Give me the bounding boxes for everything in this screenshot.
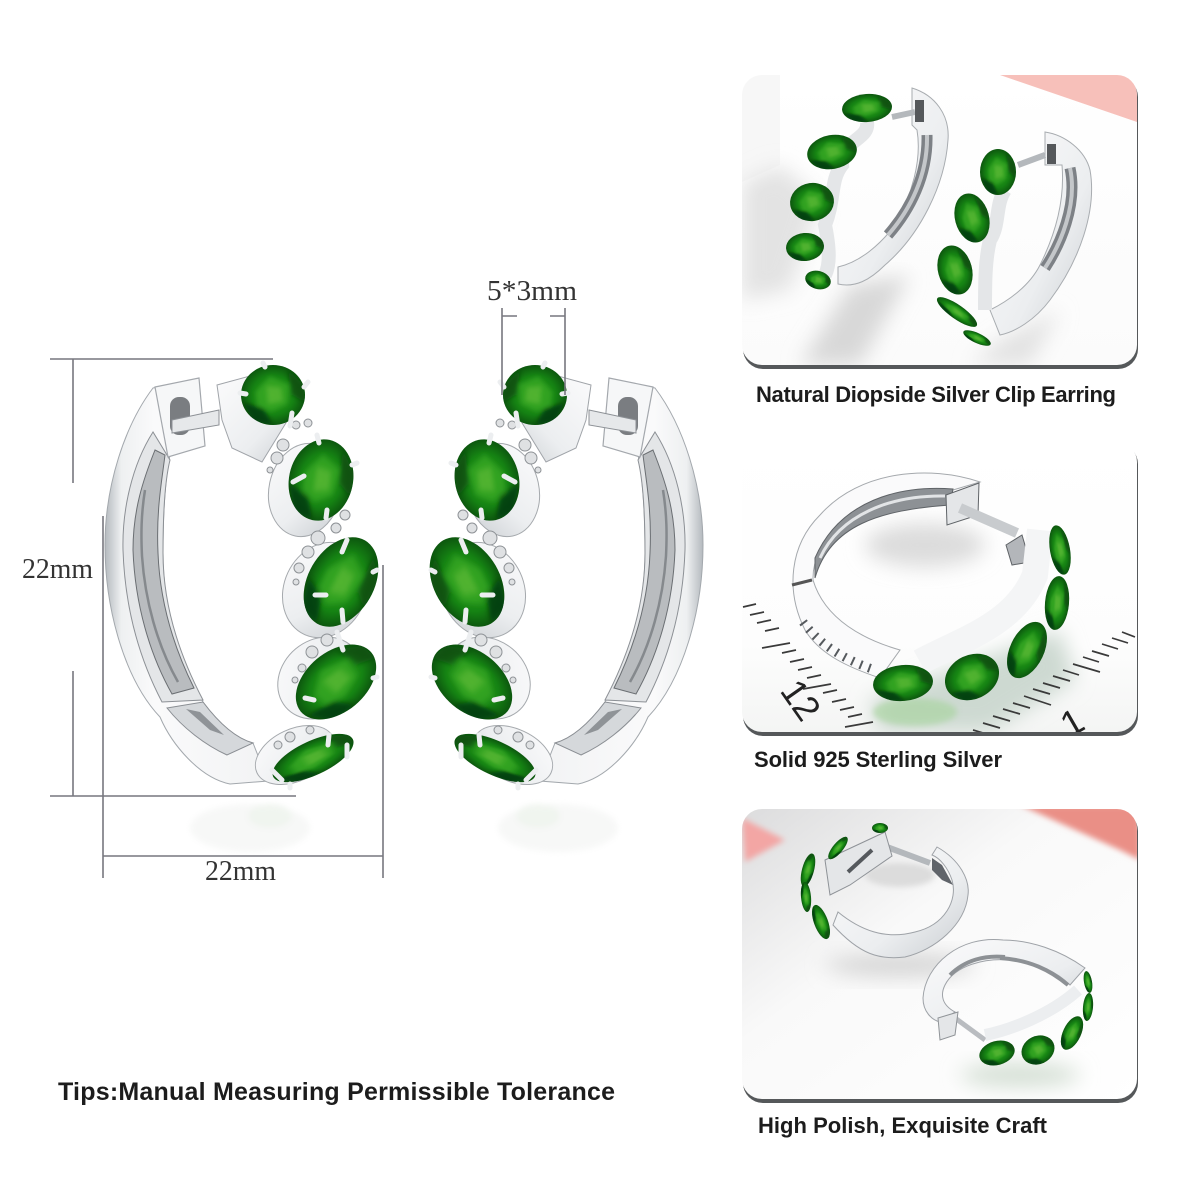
ruler numeral 12: 12 [773, 672, 829, 728]
panel: ruler photo [742, 442, 1138, 745]
dimension: width 22mm: 22mm [205, 856, 276, 887]
earrings reflection [190, 804, 618, 852]
caption: panel 3: High Polish, Exquisite Craft [758, 1113, 1048, 1138]
caption: panel 1: Natural Diopside Silver Clip Earring [756, 382, 1116, 407]
panel: polish photo [742, 805, 1140, 1103]
caption: panel 2: Solid 925 Sterling Silver [754, 747, 1002, 772]
main earring: right (mirrored) [414, 363, 703, 796]
second clip earring [932, 132, 1092, 349]
dimension: height 22mm: 22mm [22, 554, 93, 585]
background props [742, 75, 1137, 365]
ruler scale [743, 604, 1135, 738]
lower hoop [923, 939, 1094, 1070]
hoop on ruler [792, 473, 1074, 709]
panel: clip earring photo [742, 75, 1138, 369]
pink backdrop [742, 805, 1140, 1087]
upper hoop [798, 823, 968, 958]
dimension: stone size 5*3mm [487, 276, 577, 395]
dimension: height 22mm [22, 359, 296, 796]
dimension: stone size 5*3mm: 5*3mm [487, 276, 577, 307]
main earring: left [105, 363, 394, 796]
tips text: Tips:Manual Measuring Permissible Tolerance [58, 1078, 615, 1106]
green reflection [870, 630, 1075, 732]
first clip earring [785, 88, 948, 292]
dimension: width 22mm [103, 516, 383, 887]
ruler numeral 1: 1 [1053, 700, 1091, 745]
